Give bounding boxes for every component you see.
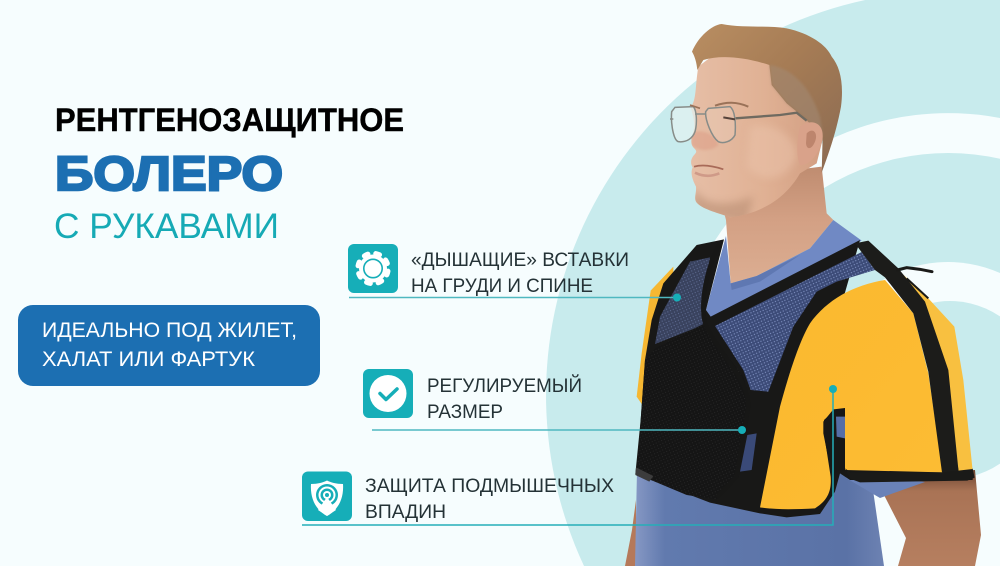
armhole [823,408,845,454]
yellow front with sleeve [760,280,943,509]
blue mesh left shoulder [655,257,710,344]
blue mesh over chest [715,252,875,392]
ear [798,122,823,154]
head [670,24,842,283]
heading line: РЕНТГЕНОЗАЩИТНОЕ: РЕНТГЕНОЗАЩИТНОЕ [55,102,404,138]
label text [411,249,629,297]
heading line: С РУКАВАМИ: С РУКАВАМИ [54,207,279,246]
brow, eye and mouth [690,103,748,176]
face shading [692,125,797,223]
leader line with dot [349,294,681,302]
label text: ЗАЩИТА ПОДМЫШЕЧНЫХ [365,475,614,497]
background concentric arcs [546,0,1000,566]
label text: РАЗМЕР [427,401,503,423]
leader line with dot [372,426,746,434]
front panel binding [703,244,748,497]
vest dark silhouette [635,239,973,517]
title [54,102,404,246]
feature: adjustable size [363,369,746,434]
heading line: БОЛЕРО: БОЛЕРО [55,148,283,201]
callout: blue badge: ХАЛАТ ИЛИ ФАРТУК [42,348,256,371]
label text: ВПАДИН [365,501,446,523]
label text: РЕГУЛИРУЕМЫЙ [427,373,582,397]
icon: check mark [363,369,413,418]
adjustment cord [897,268,932,272]
feature: breathable inserts [348,244,681,302]
label text [365,475,614,523]
label text [427,373,582,423]
neck [720,167,833,283]
lower blue mesh gap [740,433,757,472]
black mesh front panel [637,324,750,499]
shirt collar [706,220,862,322]
glasses [670,107,807,143]
man wearing the protective bolero [625,24,981,566]
hair [692,24,842,173]
face [691,50,823,217]
callout: blue badge: ИДЕАЛЬНО ПОД ЖИЛЕТ, [42,319,297,342]
callout: blue badge [18,305,320,386]
left yellow back panel [637,267,673,407]
yellow outer sleeve strip [898,270,973,472]
icon: gear [348,244,398,293]
lower torso and arms [625,470,981,566]
leader line with dot [302,385,837,525]
label text: НА ГРУДИ И СПИНЕ [411,275,593,297]
shoulder strap [855,241,959,472]
sleeve hem [845,468,975,482]
bolero vest [635,220,975,517]
feature: underarm protection [302,385,837,525]
icon: shield [302,472,352,521]
label text: «ДЫШАЩИЕ» ВСТАВКИ [411,249,629,271]
